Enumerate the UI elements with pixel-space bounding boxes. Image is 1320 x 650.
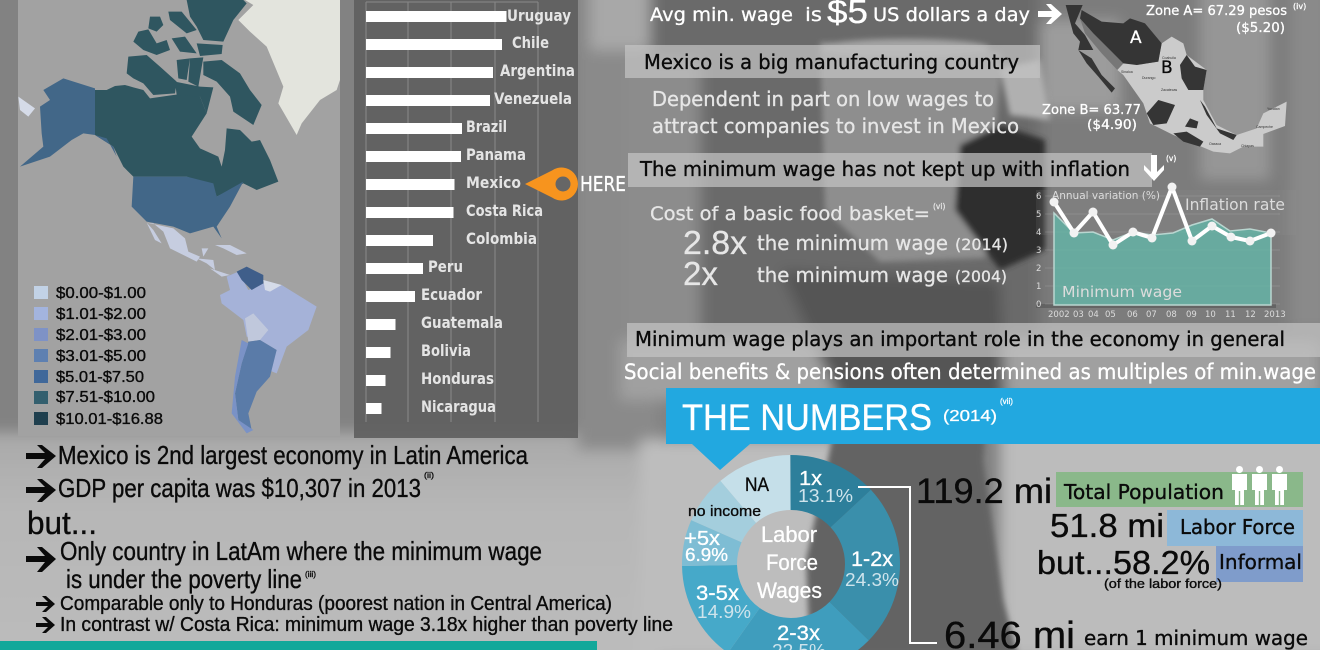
- donut labels: Wages: [757, 578, 822, 603]
- zone labels: B: [1161, 58, 1173, 78]
- panel: informal: Informal: [1219, 550, 1302, 574]
- chart labels: Minimum wage: [1062, 283, 1182, 301]
- map: Mexico wage zones: Campeche: [1256, 125, 1273, 129]
- text block: food basket: 2x: [683, 255, 718, 292]
- chart labels: 12: [1245, 310, 1256, 320]
- chart labels: 07: [1146, 310, 1157, 320]
- map: Mexico wage zones: Zacatecas: [1161, 88, 1177, 92]
- country labels: Colombia: [466, 229, 537, 248]
- text block: food basket: the minimum wage: [757, 263, 948, 287]
- chart labels: 2: [1036, 264, 1041, 274]
- banner: the numbers: (vii): [1000, 397, 1013, 406]
- text block: economy facts: Comparable only to Honduras (poorest nation in Central America): [60, 593, 612, 615]
- map: Mexico wage zones: Sinaloa: [1121, 70, 1133, 74]
- donut labels: no income: [688, 503, 761, 520]
- chart labels: 1: [1036, 282, 1041, 292]
- text block: economy facts: GDP per capita was $10,307 in 2013: [58, 473, 421, 503]
- text block: food basket: the minimum wage: [757, 231, 948, 255]
- legend: $10.01-$16.88: [56, 411, 163, 428]
- stat: earn one minimum wage: [944, 615, 1308, 650]
- stat: earn one minimum wage: earn 1 minimum wage: [1084, 626, 1308, 650]
- donut labels: NA: [745, 475, 769, 496]
- text block: economy facts: Mexico is 2nd largest economy in Latin America: [58, 440, 528, 470]
- chart labels: 5: [1036, 210, 1041, 220]
- text block: food basket: [650, 202, 1008, 292]
- chart labels: 06: [1127, 310, 1138, 320]
- country labels: Panama: [466, 145, 526, 164]
- country labels: Argentina: [500, 61, 575, 80]
- chart labels: 10: [1205, 310, 1216, 320]
- legend: $1.01-$2.00: [56, 306, 146, 323]
- country labels: Guatemala: [421, 313, 503, 332]
- country labels: Honduras: [421, 369, 494, 388]
- legend: $2.01-$3.00: [56, 327, 146, 344]
- legend: $3.01-$5.00: [56, 348, 146, 365]
- country labels: Chile: [512, 33, 549, 52]
- country labels: Bolivia: [421, 341, 471, 360]
- pin label: HERE: [580, 172, 626, 196]
- panel: minimum wage bar chart: [354, 0, 578, 438]
- panel: labor force: Labor Force: [1180, 515, 1295, 539]
- chart labels: Annual variation (%): [1052, 190, 1160, 202]
- country labels: Ecuador: [421, 285, 482, 304]
- country labels: Nicaragua: [421, 397, 496, 416]
- country labels: Venezuela: [494, 89, 572, 108]
- chart labels: 04: [1088, 310, 1099, 320]
- legend: $7.51-$10.00: [56, 389, 155, 406]
- chart labels: 0: [1036, 300, 1041, 310]
- map: Mexico wage zones: Coahuila: [1162, 56, 1176, 60]
- zone labels: Zone A= 67.29 pesos: [1146, 3, 1287, 19]
- text block: low wages: Dependent in part on low wages to: [652, 87, 994, 111]
- panel: total population: Total Population: [1063, 480, 1224, 504]
- donut labels: 3-5x: [696, 582, 740, 605]
- zone labels: A: [1130, 28, 1142, 48]
- map: Mexico wage zones: [1066, 5, 1287, 153]
- inflation line: [1050, 182, 1276, 250]
- chart: labor force wages donut: [684, 468, 899, 650]
- panel: total population: 119.2 mi: [916, 472, 1052, 511]
- icon: three people: [1232, 466, 1287, 505]
- panel: total population: [916, 466, 1303, 511]
- legend: [34, 285, 163, 428]
- text block: economy facts: (iii): [305, 570, 316, 579]
- chart labels: 03: [1073, 310, 1084, 320]
- legend: $5.01-$7.50: [56, 369, 144, 386]
- heading: average minimum wage: Avg min. wage: [650, 4, 793, 26]
- text block: low wages: [652, 87, 1019, 138]
- panel: manufacturing: Mexico is a big manufacturing country: [644, 50, 1019, 74]
- country labels: Costa Rica: [466, 201, 543, 220]
- country labels: Mexico: [466, 173, 521, 192]
- panel: inflation statement: [628, 153, 1152, 187]
- text block: economy facts: Only country in LatAm where the minimum wage: [60, 536, 542, 566]
- zone labels: [1042, 2, 1306, 133]
- map shapes: [18, 0, 340, 433]
- panel: wage map of the Americas: [18, 0, 340, 436]
- text block: economy facts: [26, 440, 673, 636]
- chart labels: 6: [1036, 192, 1041, 202]
- icon: white arrow to Mexico map: [1038, 4, 1062, 24]
- text block: food basket: 2.8x: [683, 224, 748, 261]
- donut labels: 6.9%: [685, 545, 728, 565]
- text block: low wages: attract companies to invest in Mexico: [652, 114, 1019, 138]
- text block: food basket: Cost of a basic food basket=: [650, 203, 930, 225]
- panel: role in economy: [627, 323, 1320, 357]
- chart labels: [1036, 190, 1286, 320]
- map: Mexico wage zones: Oaxaca: [1209, 142, 1221, 146]
- donut labels: 24.3%: [845, 570, 899, 590]
- panel: manufacturing: [625, 45, 1040, 78]
- heading: average minimum wage: [650, 0, 1030, 30]
- heading: average minimum wage: is: [805, 4, 822, 26]
- text block: economy facts: is under the poverty line: [66, 564, 302, 594]
- icon: down arrow: [1144, 155, 1164, 181]
- donut labels: Force: [766, 550, 818, 575]
- text block: food basket: (2014): [955, 235, 1008, 254]
- zone labels: (iv): [1293, 2, 1306, 11]
- heading: average minimum wage: US dollars a day: [873, 4, 1030, 26]
- country labels: [421, 6, 575, 416]
- icon: orange location pin: [525, 168, 578, 201]
- bars: [366, 11, 506, 414]
- zone labels: ($4.90): [1087, 117, 1137, 133]
- chart labels: 05: [1105, 310, 1116, 320]
- zone labels: Zone B= 63.77: [1042, 102, 1141, 118]
- country labels: Uruguay: [507, 6, 571, 25]
- chart labels: 4: [1036, 228, 1041, 238]
- footnote v: (v): [1166, 154, 1176, 163]
- chart: inflation vs minimum wage: [1036, 182, 1296, 320]
- country labels: Peru: [428, 257, 463, 276]
- connector line: [858, 487, 937, 643]
- text block: economy facts: In contrast w/ Costa Rica: minimum wage 3.18x higher than poverty line: [60, 614, 673, 636]
- donut labels: [684, 468, 899, 650]
- panel: labor force: [1050, 507, 1303, 546]
- banner: the numbers: THE NUMBERS: [682, 397, 932, 438]
- panel: informal: (of the labor force): [1104, 576, 1222, 591]
- donut labels: 13.1%: [798, 486, 853, 506]
- icon: arrows: [26, 445, 56, 633]
- minimum wage area: [1054, 213, 1271, 305]
- panel: informal: but...58.2%: [1037, 544, 1210, 581]
- panel: labor force: 51.8 mi: [1050, 507, 1164, 544]
- panel: role in economy: Minimum wage plays an important role in the economy in general: [635, 327, 1285, 351]
- legend: $0.00-$1.00: [56, 285, 146, 302]
- donut labels: +5x: [684, 528, 720, 550]
- donut labels: 1x: [799, 468, 822, 490]
- chart labels: Inflation rate: [1185, 195, 1285, 214]
- chart labels: 08: [1166, 310, 1177, 320]
- map: Mexico wage zones: Chiapas: [1241, 144, 1254, 148]
- zone labels: ($5.20): [1236, 20, 1285, 36]
- banner: the numbers: [666, 388, 1320, 470]
- text block: economy facts: (ii): [424, 471, 434, 480]
- donut labels: 1-2x: [851, 548, 894, 571]
- map: Mexico wage zones: Yucatan: [1267, 107, 1280, 111]
- decorative teal bar: [0, 641, 597, 650]
- panel: inflation statement: The minimum wage has not kept up with inflation: [639, 157, 1130, 181]
- banner: the numbers: (2014): [943, 408, 997, 425]
- text block: economy facts: but...: [27, 505, 97, 541]
- donut labels: Labor: [761, 522, 817, 547]
- chart labels: 11: [1225, 310, 1236, 320]
- chart labels: 3: [1036, 246, 1041, 256]
- chart labels: 2002: [1048, 310, 1070, 320]
- panel: informal: [1037, 544, 1303, 591]
- text block: food basket: (vi): [933, 202, 945, 211]
- chart labels: 2013: [1264, 310, 1286, 320]
- donut labels: 2-3x: [777, 622, 821, 645]
- chart labels: 09: [1186, 310, 1197, 320]
- country labels: Brazil: [466, 117, 507, 136]
- map: Mexico wage zones: Durango: [1142, 76, 1155, 80]
- donut labels: 14.9%: [697, 602, 751, 622]
- text block: food basket: (2004): [955, 267, 1007, 286]
